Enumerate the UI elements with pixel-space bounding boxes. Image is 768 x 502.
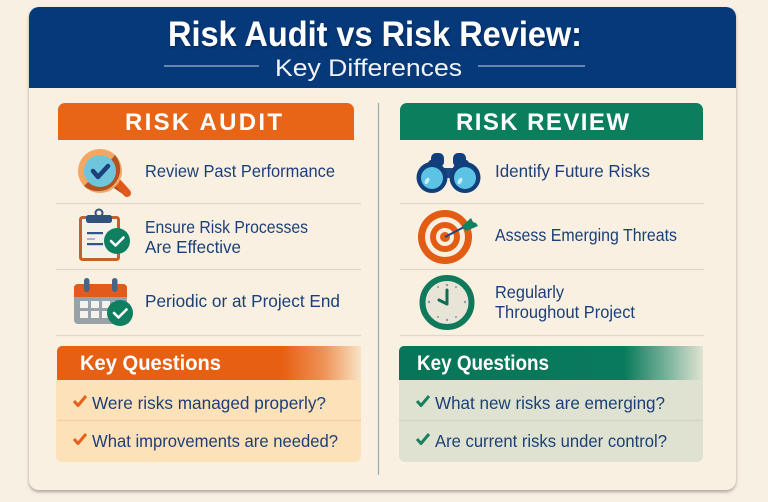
item: regularly throughout project <box>495 282 635 322</box>
check <box>74 434 86 444</box>
title: Risk Audit vs Risk Review: <box>168 15 582 54</box>
item: identify future risks: Identify Future Risks <box>495 161 650 181</box>
item: periodic or at project end: Periodic or at Project End <box>145 291 340 311</box>
icon: magnifying glass <box>78 149 127 194</box>
risk audit heading <box>58 103 354 140</box>
panel: risk audit <box>56 103 361 462</box>
key questions: risk audit: Were risks managed properly? <box>92 393 326 413</box>
key questions: risk review: What new risks are emerging? <box>435 393 665 413</box>
risk audit heading: RISK AUDIT <box>125 109 282 136</box>
key questions: risk review <box>399 346 703 462</box>
risk review heading <box>400 103 703 140</box>
subtitle: Key Differences <box>275 55 462 82</box>
icon: binoculars <box>416 153 480 193</box>
item: ensure risk processes: Are Effective <box>145 237 241 257</box>
key questions: risk review: Are current risks under control? <box>435 431 667 451</box>
header banner <box>29 7 736 88</box>
item: ensure risk processes <box>145 217 308 257</box>
key questions: risk audit: What improvements are needed? <box>92 431 338 451</box>
item: review past performance: Review Past Performance <box>145 161 335 181</box>
risk review heading: RISK REVIEW <box>456 109 629 136</box>
icon: clock <box>422 278 472 327</box>
icon: calendar with check <box>74 278 133 326</box>
key questions: risk audit <box>56 346 361 462</box>
key questions: risk audit: Key Questions <box>80 352 221 375</box>
icon: clipboard with check <box>80 210 130 260</box>
check <box>417 396 429 406</box>
item: ensure risk processes: Ensure Risk Processes <box>145 217 308 237</box>
key questions: risk review: Key Questions <box>417 352 549 375</box>
icon: target with dart <box>418 210 478 264</box>
panel: risk review <box>399 103 704 462</box>
item: regularly throughout project: Regularly <box>495 282 564 302</box>
check <box>417 434 429 444</box>
item: assess emerging threats: Assess Emerging Threats <box>495 225 677 245</box>
item: regularly throughout project: Throughout Project <box>495 302 635 322</box>
check <box>74 396 86 406</box>
